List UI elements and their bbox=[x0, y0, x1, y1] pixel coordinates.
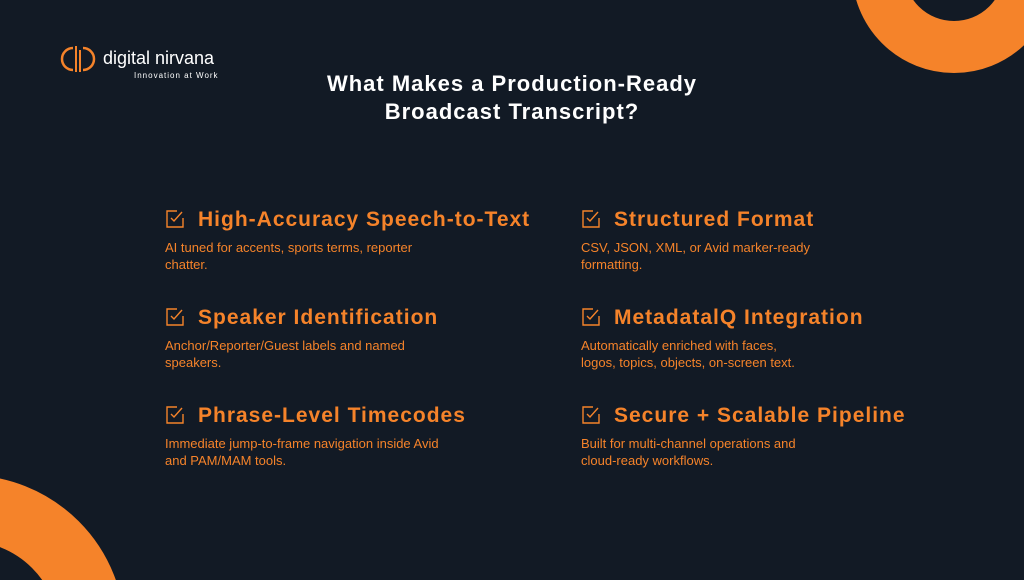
item: Secure + Scalable: Built for multi-channel operations and bbox=[581, 436, 796, 451]
item: Structured Format: Structured Format bbox=[614, 208, 814, 231]
item: High-Accuracy: High-Accuracy Speech-to-Text bbox=[198, 208, 530, 231]
item: Speaker Identification: Speaker Identification bbox=[198, 306, 438, 329]
logo bbox=[60, 46, 219, 80]
logo: digital nirvana bbox=[103, 48, 214, 68]
item: Secure + Scalable bbox=[581, 404, 906, 468]
title: Broadcast Transcript? bbox=[385, 99, 639, 124]
title: What Makes a Production-Ready bbox=[327, 71, 697, 96]
item: Phrase-Level Timecodes: Immediate jump-to-frame navigation inside Avid and PAM/MAM tools. bbox=[165, 436, 439, 468]
item: Phrase-Level Timecodes: Phrase-Level Timecodes bbox=[198, 404, 466, 427]
item: Speaker Identification bbox=[165, 306, 438, 370]
logo: Innovation at Work bbox=[134, 71, 219, 80]
item: MetadataIQ: logos, topics, objects, on-screen text. bbox=[581, 355, 795, 370]
item: MetadataIQ bbox=[581, 306, 864, 370]
icon: logo mark bbox=[60, 46, 96, 72]
item: Secure + Scalable: cloud-ready workflows. bbox=[581, 453, 713, 468]
item: High-Accuracy: AI tuned for accents, sports terms, reporter chatter. bbox=[165, 240, 412, 272]
item: Structured Format: CSV, JSON, XML, or Avid marker-ready formatting. bbox=[581, 240, 810, 272]
item: High-Accuracy bbox=[165, 208, 530, 272]
item: Speaker Identification: Anchor/Reporter/Guest labels and named speakers. bbox=[165, 338, 405, 370]
item: Structured Format bbox=[581, 208, 814, 272]
item: MetadataIQ: MetadatalQ Integration bbox=[614, 306, 864, 329]
item: Secure + Scalable: Secure + Scalable Pipeline bbox=[614, 404, 906, 427]
title bbox=[327, 71, 697, 124]
item: Phrase-Level Timecodes bbox=[165, 404, 466, 468]
item: MetadataIQ: Automatically enriched with faces, bbox=[581, 338, 777, 353]
